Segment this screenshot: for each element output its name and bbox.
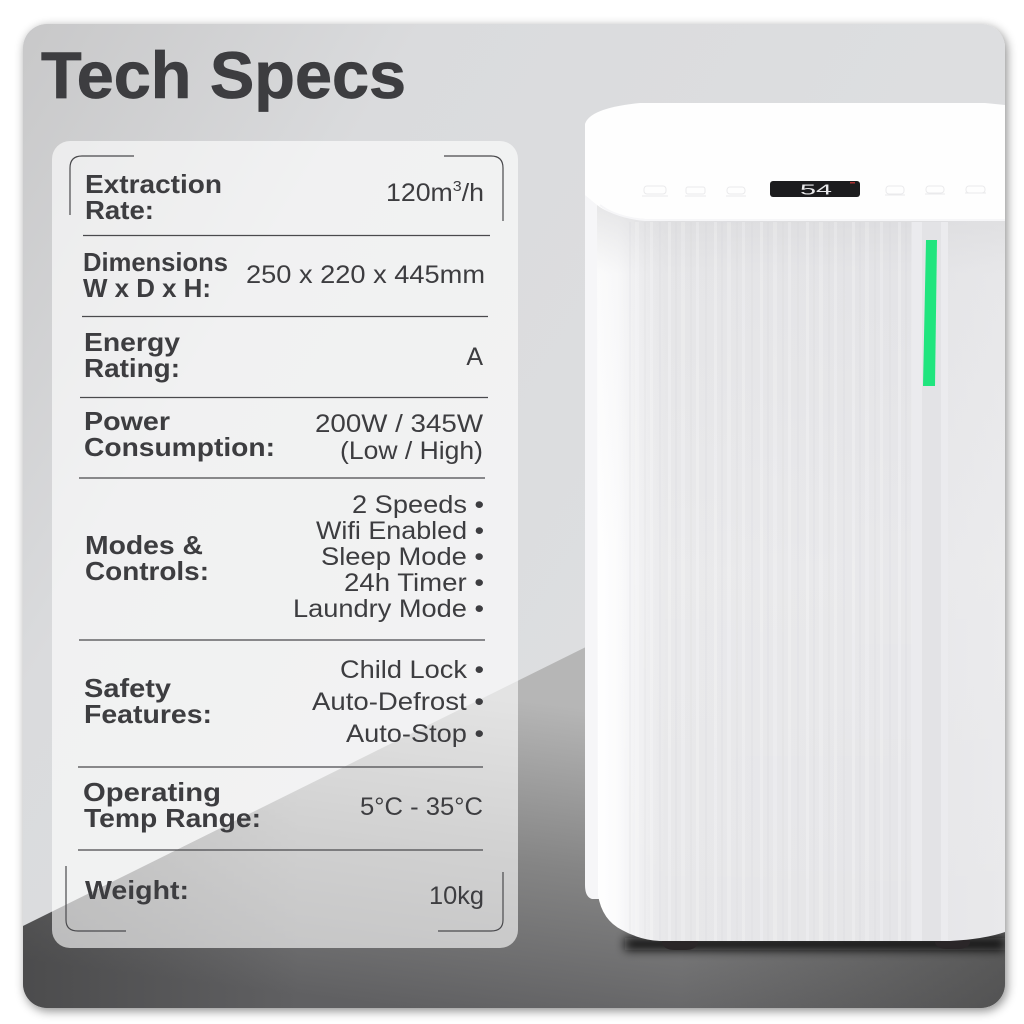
- spec: safety features: Auto-Defrost •: [312, 688, 484, 716]
- spec: energy rating: Rating:: [84, 353, 180, 383]
- product: dehumidifier: [585, 103, 1005, 950]
- spec: operating temperature range: [83, 777, 483, 833]
- rear panel: [585, 195, 599, 899]
- panel background: [52, 141, 518, 948]
- title: Tech Specs: [41, 38, 406, 112]
- spec: modes and controls: Wifi Enabled •: [316, 517, 484, 545]
- spec: dimensions: [83, 247, 485, 303]
- spec: dimensions: 250 x 220 x 445mm: [246, 261, 485, 289]
- spec: weight: 10kg: [429, 882, 484, 910]
- display: [770, 181, 860, 198]
- spec: modes and controls: Controls:: [85, 556, 209, 586]
- spec: extraction rate: [85, 169, 484, 225]
- spec: modes and controls: 24h Timer •: [344, 569, 484, 597]
- spec: energy rating: [84, 327, 483, 383]
- spec: power consumption: 200W / 345W: [315, 410, 483, 438]
- main body: [597, 200, 1005, 941]
- spec: extraction rate: 3: [453, 178, 462, 195]
- spec: power consumption: (Low / High): [340, 437, 483, 465]
- spec: modes and controls: Laundry Mode •: [293, 595, 484, 623]
- spec: extraction rate: /h: [462, 179, 484, 207]
- green indicator: [923, 240, 937, 386]
- top cap: [585, 103, 1005, 219]
- spec: weight: [85, 875, 484, 910]
- spec: power consumption: Consumption:: [84, 432, 275, 462]
- spec: safety features: Safety: [84, 673, 172, 703]
- spec: safety features: Auto-Stop •: [346, 720, 484, 748]
- spec: extraction rate: Rate:: [85, 195, 154, 225]
- spec: modes and controls: 2 Speeds •: [352, 491, 484, 519]
- spec: safety features: Child Lock •: [340, 656, 484, 684]
- spec: energy rating: Energy: [84, 327, 181, 357]
- touch buttons: [642, 186, 986, 196]
- body shading: [597, 205, 1005, 258]
- floor shadow: [625, 938, 1005, 950]
- spec: dimensions: Dimensions: [83, 247, 228, 277]
- spec: extraction rate: 120m: [386, 179, 449, 207]
- spec: operating temperature range: 5°C - 35°C: [360, 793, 483, 821]
- spec: dimensions: W x D x H:: [83, 273, 211, 303]
- spec: energy rating: A: [466, 343, 483, 371]
- spec: operating temperature range: Temp Range:: [84, 803, 261, 833]
- display: 54: [800, 182, 832, 198]
- spec: extraction rate: Extraction: [85, 169, 222, 199]
- spec: power consumption: [84, 406, 483, 465]
- cap edge: [614, 214, 1005, 221]
- spec: power consumption: Power: [84, 406, 170, 436]
- spec: safety features: [84, 656, 484, 748]
- spec: weight: Weight:: [85, 875, 189, 905]
- spec: modes and controls: [85, 491, 484, 623]
- light channel: [912, 222, 948, 268]
- spec: modes and controls: Modes &: [85, 530, 203, 560]
- ribs: [628, 222, 948, 942]
- spec: operating temperature range: Operating: [83, 777, 221, 807]
- panel corner brackets: [66, 156, 503, 931]
- spec: safety features: Features:: [84, 699, 212, 729]
- panel: specs: [52, 141, 518, 948]
- feet: [665, 941, 970, 950]
- spec: modes and controls: Sleep Mode •: [321, 543, 484, 571]
